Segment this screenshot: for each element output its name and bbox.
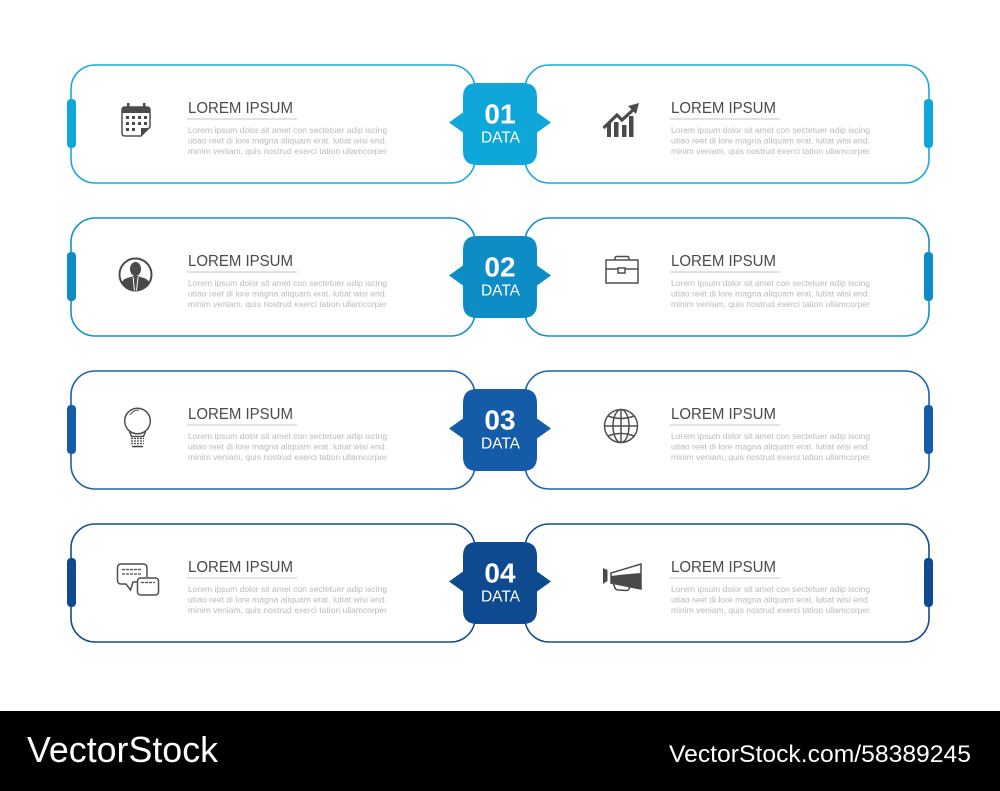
panel: row 2 right card — [525, 218, 929, 336]
panel: row 3 left card — [71, 371, 475, 489]
panel: row 1 left card — [71, 65, 475, 183]
right heading: LOREM IPSUM — [671, 100, 776, 117]
panel: row 4 right card — [525, 524, 929, 642]
row 1: minim veniam, quis nostrud exerci tation ullamcorper — [671, 146, 870, 156]
number badge 04 — [449, 542, 551, 624]
row 2: utiao reet di lore magna aliquam erat. lutiat wisi end. — [188, 288, 387, 298]
left body text: Lorem ipsum dolor sit amet con sectetuer adip iscing — [188, 278, 387, 288]
footer logo: VectorStock — [27, 729, 219, 770]
number badge 02: 02 — [484, 252, 516, 282]
right body text: Lorem ipsum dolor sit amet con sectetuer adip iscing — [671, 278, 870, 288]
left body text: Lorem ipsum dolor sit amet con sectetuer adip iscing — [188, 125, 387, 135]
left body text: Lorem ipsum dolor sit amet con sectetuer adip iscing — [188, 431, 387, 441]
number badge 04: DATA — [481, 588, 521, 606]
left heading: LOREM IPSUM — [188, 406, 293, 423]
footer bar — [0, 711, 1000, 791]
icon: growth chart — [604, 103, 639, 137]
left edge tab — [67, 405, 76, 454]
number badge 02 — [449, 236, 551, 318]
left edge tab — [67, 99, 76, 148]
panel: row 2 left card — [71, 218, 475, 336]
right body text: Lorem ipsum dolor sit amet con sectetuer adip iscing — [671, 584, 870, 594]
icon: calendar — [122, 103, 150, 136]
icon: briefcase — [606, 256, 638, 283]
row 2: minim veniam, quis nostrud exerci tation ullamcorper — [188, 299, 387, 309]
row 1: utiao reet di lore magna aliquam erat. lutiat wisi end. — [188, 136, 387, 146]
icon: globe — [604, 410, 638, 442]
number badge 01: DATA — [481, 130, 521, 146]
right edge tab — [924, 99, 933, 148]
number badge 01 — [449, 83, 551, 165]
right edge tab — [924, 252, 933, 301]
icon: light bulb — [125, 408, 150, 446]
left edge tab — [67, 558, 76, 607]
row 2: utiao reet di lore magna aliquam erat. lutiat wisi end. — [671, 288, 870, 298]
right edge tab — [924, 405, 933, 454]
left edge tab — [67, 252, 76, 301]
row 4: utiao reet di lore magna aliquam erat. lutiat wisi end. — [671, 594, 870, 604]
number badge 04: 04 — [484, 558, 516, 588]
left heading: LOREM IPSUM — [188, 253, 293, 270]
icon: businessman — [120, 258, 152, 291]
number badge 03 — [449, 389, 551, 471]
row 1 — [67, 65, 933, 183]
number badge 01: 01 — [484, 98, 516, 130]
left heading: LOREM IPSUM — [188, 559, 293, 576]
right body text: Lorem ipsum dolor sit amet con sectetuer adip iscing — [671, 125, 870, 135]
row 4: utiao reet di lore magna aliquam erat. lutiat wisi end. — [188, 594, 387, 604]
right heading: LOREM IPSUM — [671, 406, 776, 423]
row 4: minim veniam, quis nostrud exerci tation ullamcorper — [188, 605, 387, 615]
row 3: utiao reet di lore magna aliquam erat. lutiat wisi end. — [188, 442, 387, 452]
row 1: utiao reet di lore magna aliquam erat. lutiat wisi end. — [671, 136, 870, 146]
row 2: minim veniam, quis nostrud exerci tation ullamcorper — [671, 299, 870, 309]
panel: row 3 right card — [525, 371, 929, 489]
icon: chat bubbles — [118, 564, 158, 595]
row 3: utiao reet di lore magna aliquam erat. lutiat wisi end. — [671, 442, 870, 452]
row 1: minim veniam, quis nostrud exerci tation ullamcorper — [188, 146, 387, 156]
right heading: LOREM IPSUM — [671, 253, 776, 270]
row 4: minim veniam, quis nostrud exerci tation ullamcorper — [671, 605, 870, 615]
right edge tab — [924, 558, 933, 607]
row 3 — [67, 371, 933, 489]
number badge 03: 03 — [484, 404, 516, 436]
number badge 03: DATA — [481, 436, 521, 452]
number badge 02: DATA — [481, 282, 521, 300]
row 3: minim veniam, quis nostrud exerci tation ullamcorper — [188, 452, 387, 462]
panel: row 4 left card — [71, 524, 475, 642]
right body text: Lorem ipsum dolor sit amet con sectetuer adip iscing — [671, 431, 870, 441]
panel: row 1 right card — [525, 65, 929, 183]
icon: megaphone — [603, 564, 641, 590]
row 2 — [67, 218, 933, 336]
right heading: LOREM IPSUM — [671, 559, 776, 576]
footer image id: VectorStock.com/58389245 — [669, 741, 971, 768]
row 4 — [67, 524, 933, 642]
left heading: LOREM IPSUM — [188, 100, 293, 117]
row 3: minim veniam, quis nostrud exerci tation ullamcorper — [671, 452, 870, 462]
left body text: Lorem ipsum dolor sit amet con sectetuer adip iscing — [188, 584, 387, 594]
